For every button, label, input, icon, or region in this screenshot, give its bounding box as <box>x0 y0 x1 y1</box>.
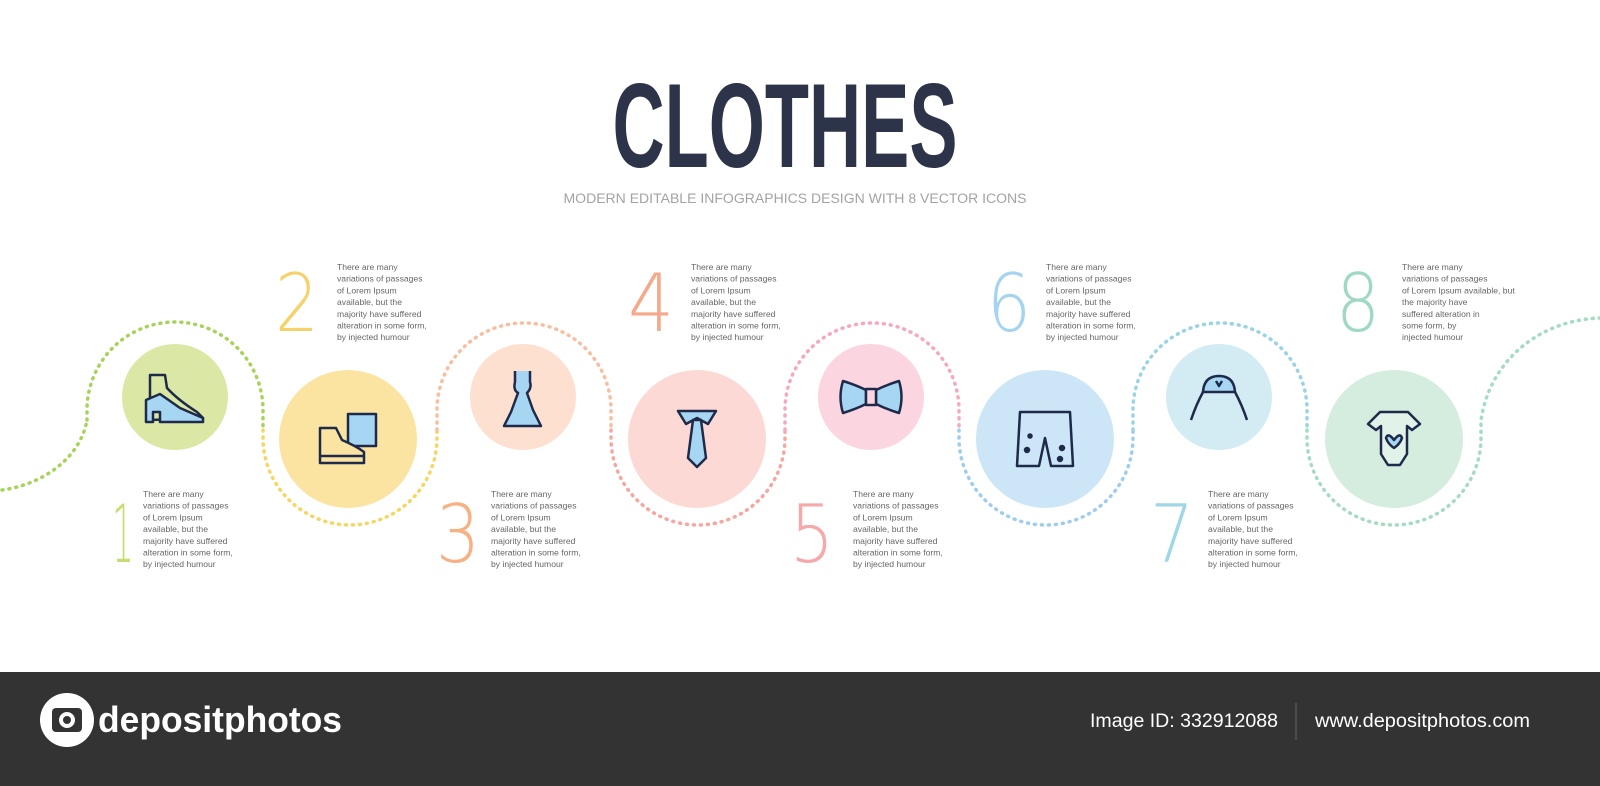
text 2: variations of passages <box>337 274 423 284</box>
text 3: of Lorem Ipsum <box>491 512 551 522</box>
text 4: of Lorem Ipsum <box>691 285 751 295</box>
text 7: of Lorem Ipsum <box>1208 512 1268 522</box>
text 5: of Lorem Ipsum <box>853 512 913 522</box>
text 4: majority have suffered <box>691 309 776 319</box>
text 5: majority have suffered <box>853 536 938 546</box>
text 8: the majority have <box>1402 297 1468 307</box>
icon: shorts <box>1017 412 1073 466</box>
text 7: available, but the <box>1208 524 1273 534</box>
text 8: injected humour <box>1402 332 1463 342</box>
text 6: of Lorem Ipsum <box>1046 285 1106 295</box>
text 3: by injected humour <box>491 559 564 569</box>
text 1: by injected humour <box>143 559 216 569</box>
text 1: majority have suffered <box>143 536 228 546</box>
text 4: variations of passages <box>691 274 777 284</box>
step 4 <box>628 257 781 508</box>
circle 4 <box>628 370 766 508</box>
text 1: of Lorem Ipsum <box>143 512 203 522</box>
step 8 <box>1325 257 1515 508</box>
text 4: There are many <box>691 262 752 272</box>
circle 7 <box>1166 344 1272 450</box>
icon: ushanka hat <box>1191 376 1247 420</box>
circle 1 <box>122 344 228 450</box>
icon: bow tie <box>840 381 902 413</box>
text 7: variations of passages <box>1208 501 1294 511</box>
text 2: available, but the <box>337 297 402 307</box>
text 7: alteration in some form, <box>1208 548 1298 558</box>
text 1: alteration in some form, <box>143 548 233 558</box>
text 3: majority have suffered <box>491 536 576 546</box>
icon: tie <box>678 411 716 467</box>
icon: boots <box>320 414 376 463</box>
text 6: There are many <box>1046 262 1107 272</box>
text 2: by injected humour <box>337 332 410 342</box>
text 4: available, but the <box>691 297 756 307</box>
number 3: 3 <box>436 488 480 581</box>
text 3: alteration in some form, <box>491 548 581 558</box>
step 2 <box>275 257 427 508</box>
text 5: alteration in some form, <box>853 548 943 558</box>
step 7 <box>1150 344 1298 581</box>
text 6: by injected humour <box>1046 332 1119 342</box>
text 5: variations of passages <box>853 501 939 511</box>
text 8: some form, by <box>1402 320 1457 330</box>
step 1 <box>112 344 233 581</box>
footer logo <box>40 693 342 747</box>
text 3: variations of passages <box>491 501 577 511</box>
icon: baby bodysuit <box>1368 412 1420 465</box>
text 5: available, but the <box>853 524 918 534</box>
text 8: of Lorem Ipsum available, but <box>1402 285 1515 295</box>
text 6: alteration in some form, <box>1046 320 1136 330</box>
footer url: www.depositphotos.com <box>1314 711 1530 732</box>
step 3 <box>436 344 581 581</box>
text 1: variations of passages <box>143 501 229 511</box>
text 5: by injected humour <box>853 559 926 569</box>
text 2: alteration in some form, <box>337 320 427 330</box>
text 6: variations of passages <box>1046 274 1132 284</box>
title: CLOTHES <box>612 59 958 193</box>
step 1: 1 <box>112 488 134 581</box>
circle 5 <box>818 344 924 450</box>
text 1: available, but the <box>143 524 208 534</box>
text 4: by injected humour <box>691 332 764 342</box>
circle 3 <box>470 344 576 450</box>
icon: dress <box>504 371 541 426</box>
circle 2 <box>279 370 417 508</box>
number 8: 8 <box>1336 257 1380 350</box>
text 7: by injected humour <box>1208 559 1281 569</box>
circle 8 <box>1325 370 1463 508</box>
text 8: There are many <box>1402 262 1463 272</box>
text 2: There are many <box>337 262 398 272</box>
text 3: There are many <box>491 489 552 499</box>
subtitle: MODERN EDITABLE INFOGRAPHICS DESIGN WITH 8 VECTOR ICONS <box>564 191 1026 206</box>
number 5: 5 <box>790 488 834 581</box>
footer logo: depositphotos <box>98 699 342 740</box>
text 1: There are many <box>143 489 204 499</box>
text 8: variations of passages <box>1402 274 1488 284</box>
text 5: There are many <box>853 489 914 499</box>
number 2: 2 <box>275 257 319 350</box>
number 7: 7 <box>1150 488 1194 581</box>
text 7: majority have suffered <box>1208 536 1293 546</box>
footer bar <box>0 672 1600 786</box>
number 4: 4 <box>628 257 674 350</box>
text 8: suffered alteration in <box>1402 309 1480 319</box>
text 4: alteration in some form, <box>691 320 781 330</box>
text 3: available, but the <box>491 524 556 534</box>
text 2: of Lorem Ipsum <box>337 285 397 295</box>
text 2: majority have suffered <box>337 309 422 319</box>
text 6: majority have suffered <box>1046 309 1131 319</box>
step 5 <box>790 344 943 581</box>
step 6 <box>976 257 1136 508</box>
footer image id: Image ID: 332912088 <box>1090 711 1278 732</box>
icon: heeled boot <box>146 375 203 422</box>
dashed connector path <box>2 318 1600 525</box>
text 6: available, but the <box>1046 297 1111 307</box>
circle 6 <box>976 370 1114 508</box>
text 7: There are many <box>1208 489 1269 499</box>
number 6: 6 <box>987 257 1031 350</box>
